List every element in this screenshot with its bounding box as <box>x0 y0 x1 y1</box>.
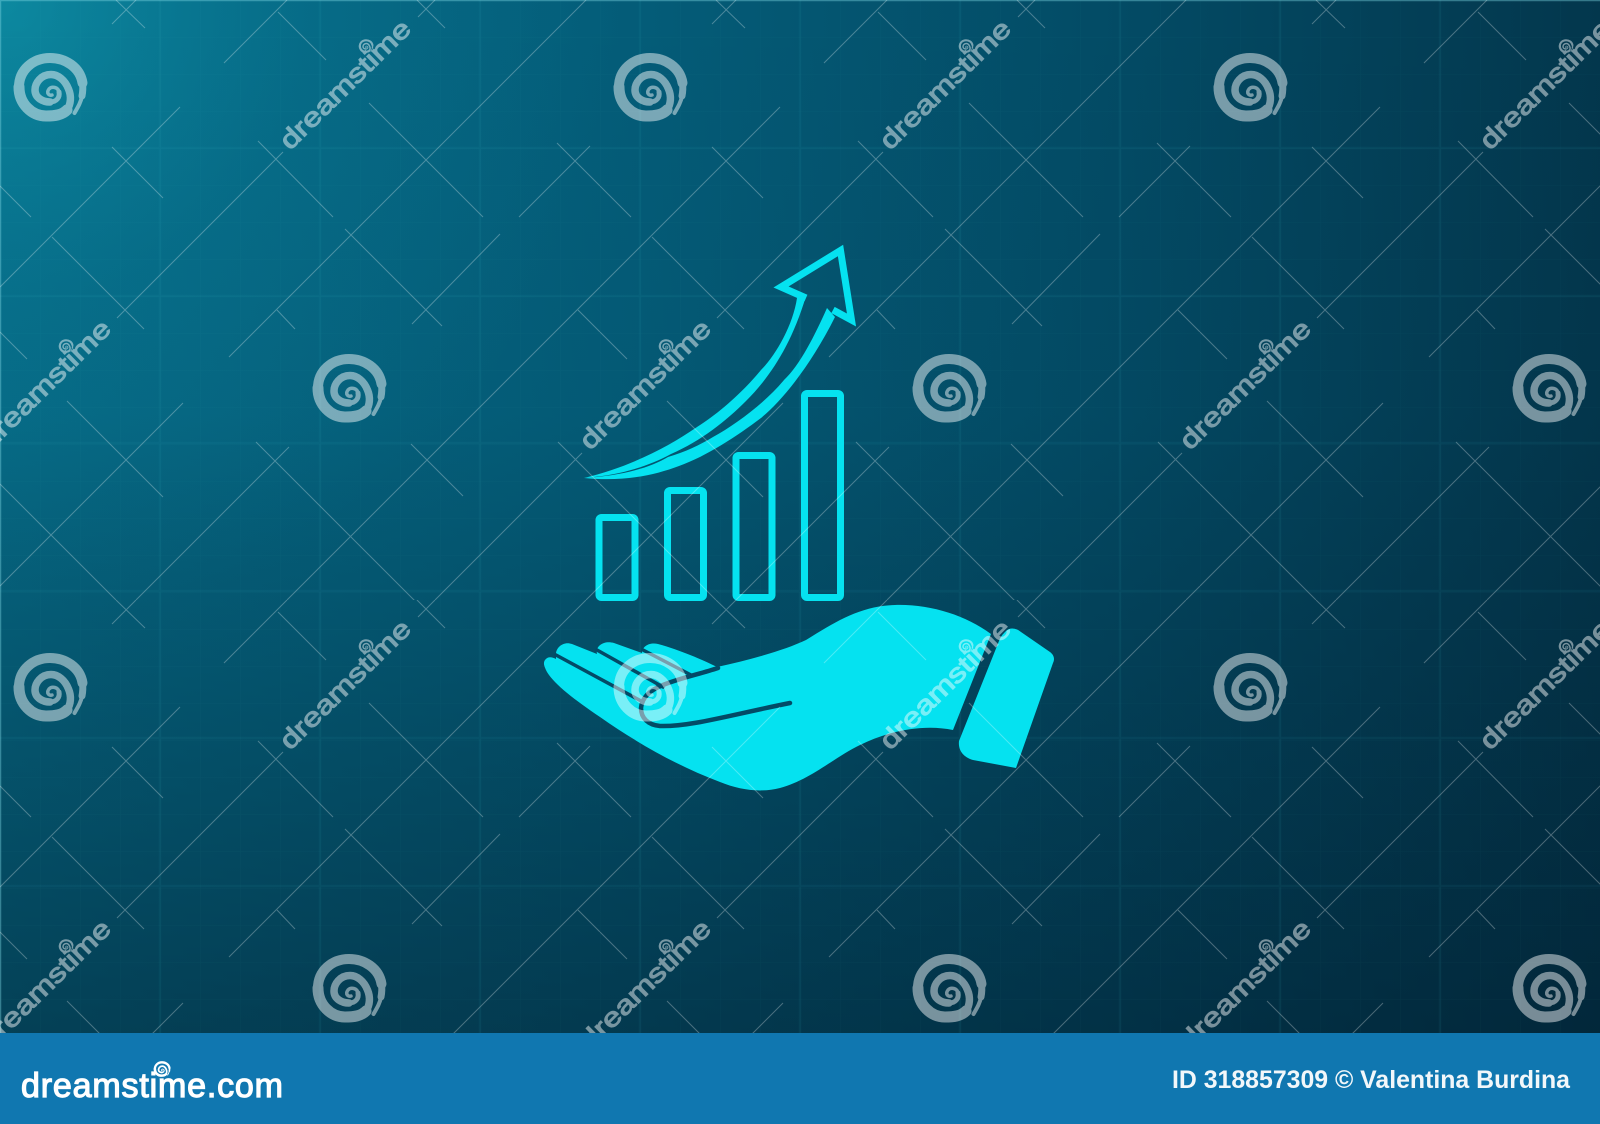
shirt cuff <box>959 628 1054 768</box>
watermark wordmarks: dreamstime <box>1473 13 1600 155</box>
watermark wordmarks: dreamstime <box>873 613 1017 755</box>
watermark wordmarks: dreamstime <box>273 613 417 755</box>
watermark wordmarks: dreamstime <box>573 913 717 1055</box>
bar chart <box>599 394 840 598</box>
watermark wordmarks: dreamstime <box>873 13 1017 155</box>
hand <box>544 605 991 790</box>
watermark wordmarks: dreamstime <box>1173 313 1317 455</box>
footer logo: dreamstime.com <box>21 1067 283 1105</box>
watermark wordmarks: dreamstime <box>273 13 417 155</box>
icon: hand holding rising bar chart <box>544 250 1054 790</box>
footer bar <box>0 1033 1600 1124</box>
image ID and credit: ID 318857309 © Valentina Burdina <box>1172 1066 1571 1094</box>
watermark wordmarks: dreamstime <box>1473 613 1600 755</box>
watermark wordmarks: dreamstime <box>1173 913 1317 1055</box>
watermark wordmarks: dreamstime <box>573 313 717 455</box>
arrow rising above bars <box>584 250 852 479</box>
